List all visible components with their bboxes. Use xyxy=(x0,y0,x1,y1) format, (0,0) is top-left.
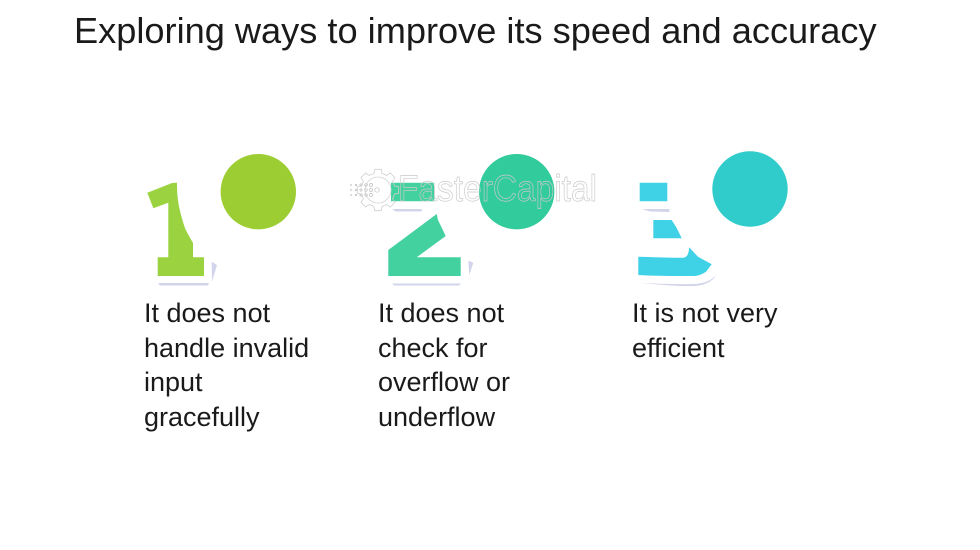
icon: numeral 2 xyxy=(388,183,473,286)
icon: circle 2 xyxy=(479,154,554,229)
text block: point 1 xyxy=(144,298,309,432)
text block: point 1: It does not xyxy=(144,298,270,328)
icon: numeral 3 xyxy=(638,183,716,286)
icon: circle 1 xyxy=(221,154,296,229)
text block: point 1: input xyxy=(144,367,203,397)
icon: numeral 1 xyxy=(147,183,217,286)
text block: point 3 xyxy=(632,298,778,363)
text block: point 3: efficient xyxy=(632,333,725,363)
text block: point 2: check for xyxy=(378,333,488,363)
watermark logo: FasterCapital xyxy=(398,168,597,209)
text block: point 2: overflow or xyxy=(378,367,510,397)
text block: point 2 xyxy=(378,298,510,432)
title: Exploring ways to improve its speed and accuracy xyxy=(74,10,877,51)
text block: point 1: gracefully xyxy=(144,402,260,432)
text block: point 3: It is not very xyxy=(632,298,778,328)
icon: circle 3 xyxy=(712,151,788,227)
text block: point 2: underflow xyxy=(378,402,495,432)
text block: point 2: It does not xyxy=(378,298,504,328)
text block: point 1: handle invalid xyxy=(144,333,309,363)
